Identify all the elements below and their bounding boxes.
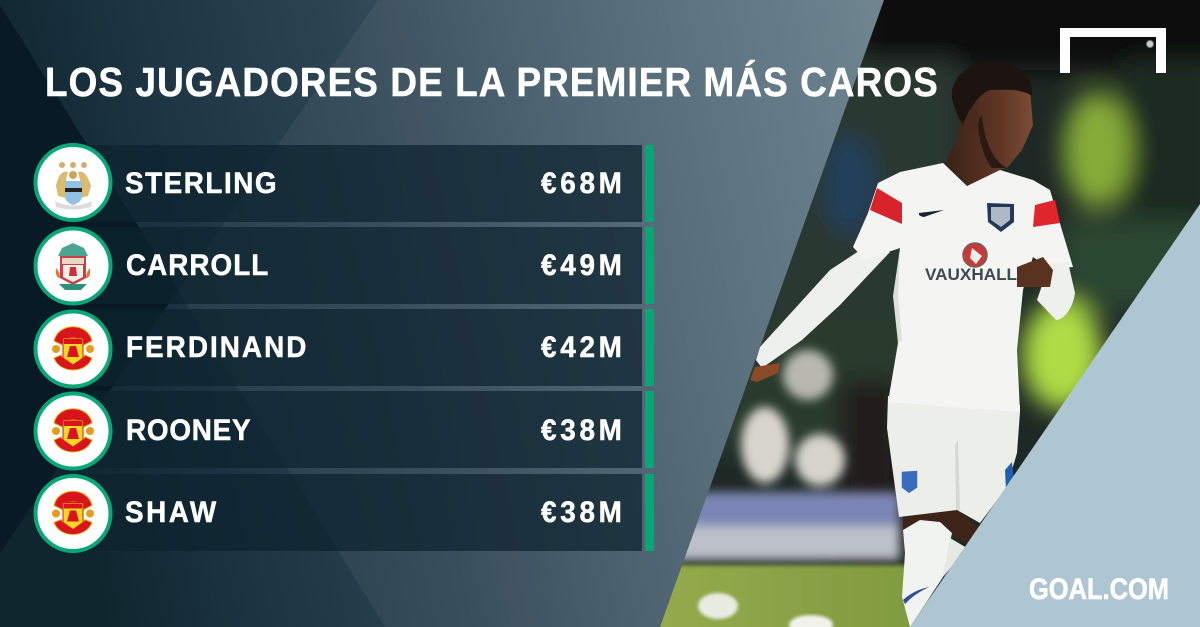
badge: Manchester United (Rooney) <box>36 394 110 468</box>
player photo <box>750 62 1075 627</box>
row: Shaw <box>73 474 654 551</box>
england crest <box>987 203 1014 232</box>
dark facet <box>0 5 178 553</box>
goal logo <box>1060 28 1166 73</box>
row: Sterling <box>73 145 654 222</box>
shirt red band left <box>870 188 902 224</box>
badge: Manchester City <box>36 145 110 220</box>
england crest shorts <box>901 470 918 494</box>
row: Rooney <box>73 391 654 468</box>
row: Carroll <box>73 227 654 304</box>
player shirt <box>853 163 1073 412</box>
row: Rooney: ROONEY <box>126 414 251 447</box>
player neck and head <box>945 62 1033 186</box>
row: Carroll: CARROLL <box>126 249 268 282</box>
badge: Manchester United (Ferdinand) <box>36 312 110 386</box>
row: Sterling: STERLING <box>125 167 277 200</box>
player socks <box>902 520 952 627</box>
row: Carroll: €49M <box>541 249 622 282</box>
left panel background <box>0 0 884 627</box>
player shorts <box>887 396 1020 523</box>
player legs <box>903 505 978 544</box>
vauxhall text: VAUXHALL <box>925 265 1017 284</box>
ranking list <box>73 145 654 551</box>
player arm left <box>756 245 890 368</box>
goal.com wordmark: GOAL.COM <box>1029 573 1169 606</box>
light triangle corner <box>910 204 1200 627</box>
row: Shaw: €38M <box>541 496 622 529</box>
title: LOS JUGADORES DE LA PREMIER MÁS CAROS <box>45 59 938 105</box>
row: Sterling: €68M <box>541 167 622 200</box>
row: Ferdinand: FERDINAND <box>126 331 306 364</box>
row: Ferdinand <box>73 309 654 386</box>
shirt red band right <box>1033 200 1060 227</box>
vauxhall logo <box>963 243 987 267</box>
nike swoosh <box>919 210 944 217</box>
photo background: blurred stadium <box>640 0 1200 627</box>
row: Rooney: €38M <box>541 414 622 447</box>
lighter facet <box>178 0 884 627</box>
badge: Liverpool <box>36 228 110 304</box>
row: Ferdinand: €42M <box>541 331 622 364</box>
row: Shaw: SHAW <box>125 496 217 529</box>
badge: Manchester United (Shaw) <box>36 476 110 551</box>
player arm right <box>1037 262 1075 320</box>
